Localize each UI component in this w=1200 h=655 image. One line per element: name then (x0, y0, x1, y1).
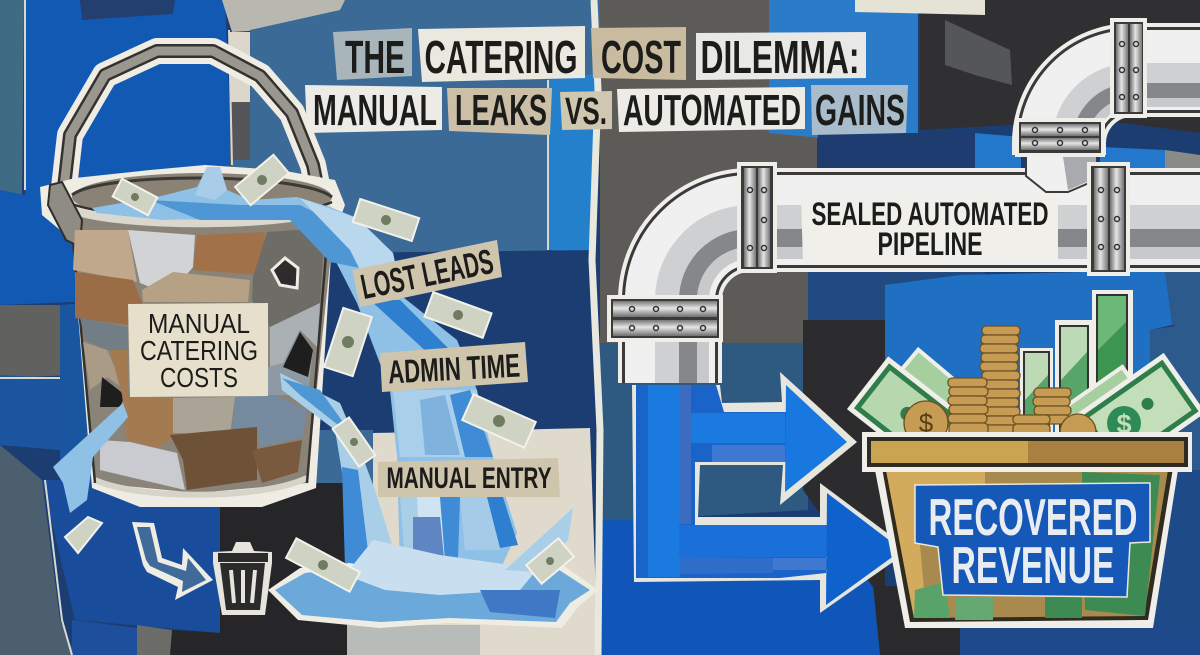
label: manual catering costs: MANUAL (148, 308, 250, 339)
cash fans: $ (1116, 409, 1132, 439)
label: recovered revenue: REVENUE (952, 537, 1114, 595)
title line 1 (345, 31, 860, 83)
icon: trash can (213, 542, 272, 615)
green chart bars (1020, 290, 1133, 443)
title (305, 26, 908, 135)
title line 1: DILEMMA: (700, 31, 860, 83)
upper arrow head (785, 385, 847, 492)
basket rim (862, 432, 1192, 472)
label: manual catering costs: COSTS (160, 362, 238, 393)
title line 1: CATERING (424, 31, 578, 83)
title line 2: LEAKS (455, 86, 547, 135)
cash fans (850, 350, 1200, 472)
label: recovered revenue (915, 483, 1150, 597)
dollar sign on coin: $ (919, 408, 934, 438)
label: manual entry (378, 458, 560, 497)
icon: sealed pipeline (609, 20, 1200, 383)
bucket body (40, 165, 345, 507)
title line 1 paper strips (333, 26, 866, 82)
strip under upper shaft (712, 445, 785, 462)
bucket hole (272, 258, 298, 288)
upper shaft (691, 413, 785, 443)
flanges (609, 20, 1145, 340)
title line 1: THE (345, 31, 405, 83)
icon: revenue basket (862, 432, 1192, 628)
paper backing (632, 372, 910, 613)
title line 2: GAINS (815, 86, 905, 135)
lower arrow head (826, 493, 902, 605)
flange rivets (630, 42, 1138, 330)
title line 2 (313, 86, 905, 135)
water overflowing and falling (53, 167, 518, 570)
title line 2: VS. (565, 91, 607, 133)
icon: small arrow to trash (132, 522, 213, 600)
side strip (680, 385, 691, 524)
strips under lower shaft (680, 557, 773, 574)
main elbow pipe (667, 217, 1200, 383)
title line 1: COST (601, 31, 681, 83)
bucket bracket (48, 182, 82, 247)
arrows: blue flow from pipe (632, 372, 910, 613)
junction stub (1026, 150, 1096, 192)
label: manual catering costs (128, 303, 268, 397)
label: admin time: ADMIN TIME (387, 347, 521, 390)
icon: leaking bucket (40, 51, 598, 628)
icon: money and coins (850, 290, 1200, 472)
bucket handle (62, 51, 320, 205)
title line 2: MANUAL (313, 86, 437, 135)
label: sealed automated pipeline (801, 194, 1058, 264)
title line 2: AUTOMATED (623, 86, 801, 135)
puddle of water (268, 508, 598, 628)
label: lost leads (352, 240, 502, 307)
label: lost leads: LOST LEADS (358, 242, 497, 307)
upper elbow pipe (1059, 70, 1200, 155)
label: manual entry: MANUAL ENTRY (386, 462, 552, 495)
basket body (875, 470, 1178, 628)
lower shaft (679, 525, 830, 557)
label: sealed automated pipeline: SEALED AUTOMATED (812, 196, 1048, 232)
label: manual catering costs: CATERING (140, 335, 258, 366)
blue backing (636, 385, 826, 578)
icons: falling dollar bills (65, 155, 574, 592)
coin stacks (904, 326, 1096, 450)
label: sealed automated pipeline: PIPELINE (878, 226, 982, 262)
title line 2 paper strips (305, 85, 908, 135)
label: admin time (380, 342, 528, 392)
vertical strip (648, 385, 680, 577)
bucket paper patches (73, 228, 325, 490)
